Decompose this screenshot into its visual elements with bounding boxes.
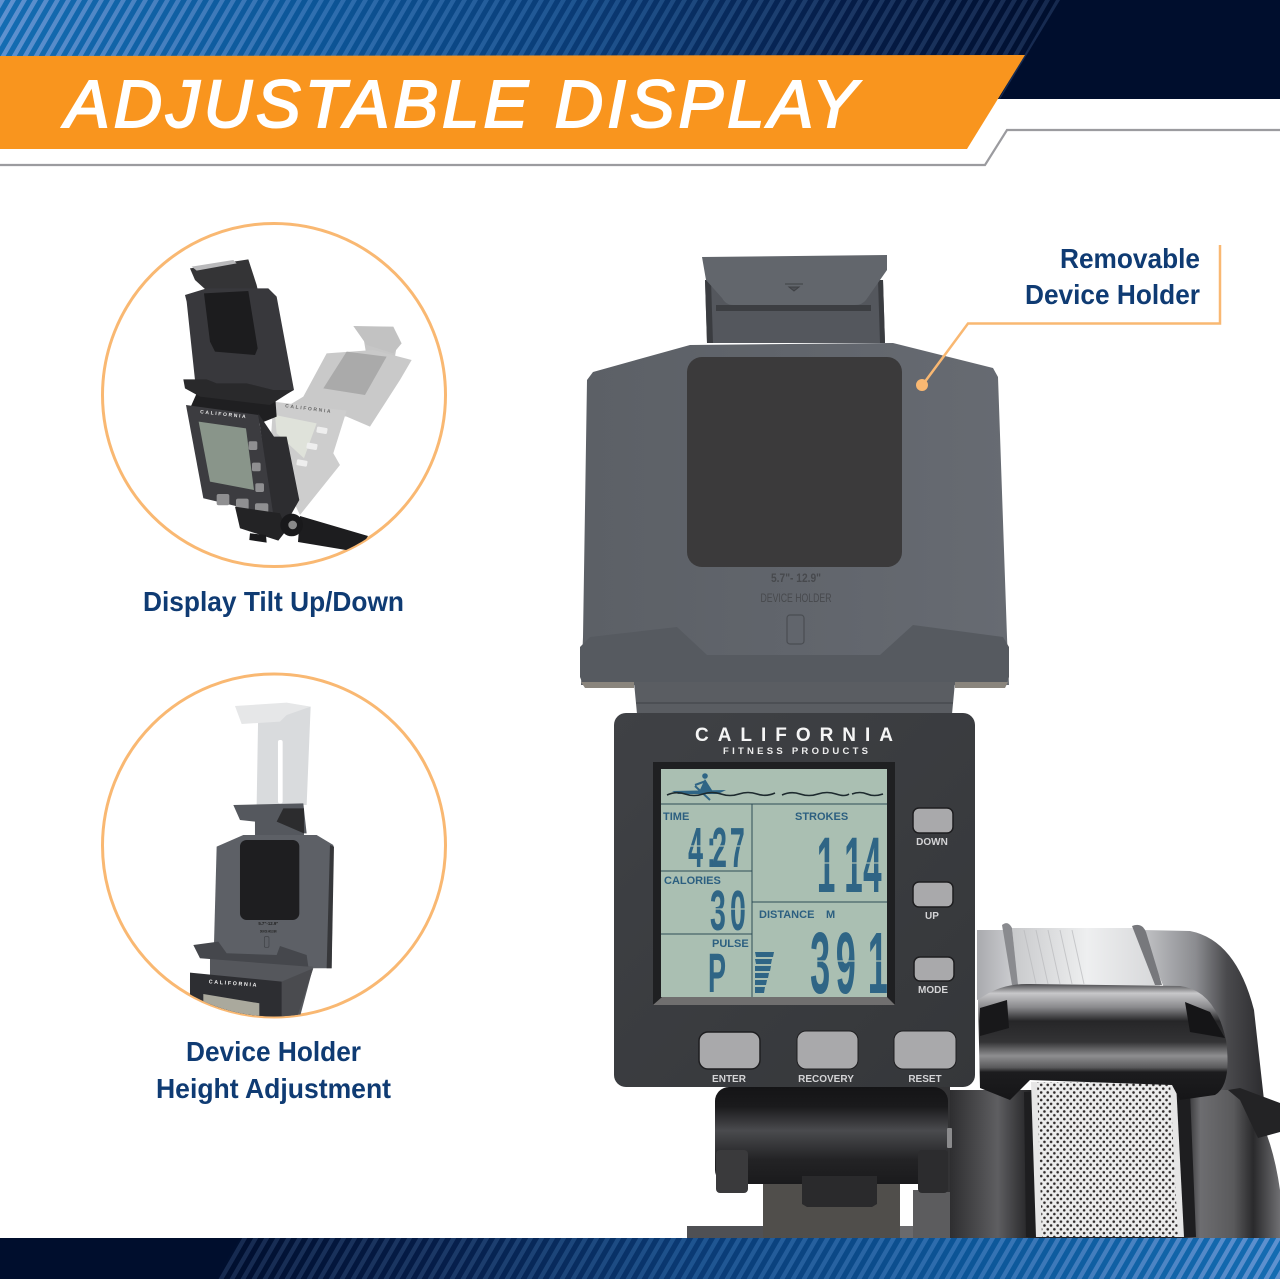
LCD readouts: 30 bbox=[710, 878, 746, 943]
device holder bbox=[580, 255, 1009, 714]
footer: striped band bbox=[0, 1238, 1280, 1279]
side buttons: DOWN bbox=[916, 837, 948, 848]
text: display tilt caption: Display Tilt Up/Down bbox=[143, 586, 404, 617]
LCD bezel bbox=[653, 762, 895, 1005]
holder top clip bbox=[702, 255, 887, 305]
tilted console and holder bbox=[183, 259, 303, 543]
ghost tilted holder bbox=[270, 326, 412, 515]
molded size text bbox=[760, 571, 832, 644]
LCD labels: M bbox=[826, 909, 835, 921]
callout text: Removable bbox=[1060, 243, 1200, 274]
foam pad bbox=[687, 357, 902, 567]
title: ADJUSTABLE DISPLAY bbox=[61, 67, 861, 142]
header: orange title ribbon bbox=[0, 55, 1025, 149]
LCD readouts: 114 bbox=[817, 820, 882, 909]
side buttons bbox=[913, 808, 954, 996]
LCD readouts: 391 bbox=[810, 916, 888, 1013]
LCD readouts: 4:27 bbox=[688, 817, 745, 880]
LCD labels: DISTANCE bbox=[759, 909, 814, 921]
brand text bbox=[695, 725, 893, 757]
mesh frame bbox=[1024, 1092, 1196, 1237]
side buttons: MODE bbox=[918, 985, 948, 996]
callout: removable device holder bbox=[916, 243, 1220, 391]
holder rear arm bbox=[705, 280, 885, 343]
lower body bbox=[948, 1090, 1280, 1238]
perforated mesh panel bbox=[1037, 1082, 1178, 1237]
LCD readouts: P bbox=[708, 941, 726, 1004]
fan housing bbox=[948, 923, 1280, 1238]
raised holder and console: DEVICE HOLDER bbox=[260, 928, 277, 933]
bottom buttons: ENTER bbox=[712, 1074, 747, 1085]
circle inset: display tilt bbox=[102, 224, 446, 566]
brand text: FITNESS PRODUCTS bbox=[723, 746, 868, 757]
water waves bbox=[667, 792, 883, 796]
molded size text: DEVICE HOLDER bbox=[760, 591, 832, 605]
rower icon bbox=[672, 773, 726, 800]
LCD labels bbox=[663, 811, 848, 950]
LCD labels: PULSE bbox=[712, 938, 749, 950]
header: striped band bbox=[0, 0, 1280, 99]
LCD labels: CALORIES bbox=[664, 875, 721, 887]
callout text: Device Holder bbox=[1025, 279, 1200, 310]
callout text bbox=[1025, 243, 1200, 310]
console bbox=[614, 713, 975, 1087]
LCD labels: TIME bbox=[663, 811, 689, 823]
circle inset: device holder height bbox=[102, 674, 446, 1018]
brand text: CALIFORNIA bbox=[695, 725, 893, 746]
tilted console and holder: CALIFORNIA bbox=[200, 409, 248, 420]
molded size text: 5.7"- 12.9" bbox=[771, 571, 821, 585]
LCD screen bbox=[661, 769, 888, 1013]
text: device holder height caption: Height Adjustment bbox=[156, 1073, 391, 1104]
holder plate bbox=[581, 343, 1009, 685]
text: device holder height caption bbox=[156, 1036, 391, 1104]
bottom buttons: RESET bbox=[908, 1074, 942, 1085]
raised holder and console bbox=[190, 703, 334, 1018]
ghost tilted holder: CALIFORNIA bbox=[285, 403, 333, 415]
fin bbox=[1228, 1088, 1280, 1138]
holder connector bbox=[634, 682, 955, 714]
raised holder and console: CALIFORNIA bbox=[209, 979, 258, 989]
text: device holder height caption: Device Holder bbox=[186, 1036, 361, 1067]
tube bbox=[298, 516, 368, 552]
silver drum bbox=[1012, 928, 1162, 990]
LCD labels: STROKES bbox=[795, 811, 848, 823]
housing side caps bbox=[977, 930, 1018, 1000]
bottom buttons: RECOVERY bbox=[798, 1074, 854, 1085]
header: grey rule bbox=[0, 130, 1280, 165]
LCD readouts bbox=[688, 817, 888, 1013]
level bars bbox=[755, 952, 774, 993]
pivot mount under console bbox=[687, 1087, 952, 1238]
raised holder and console: 5.7"-12.9" bbox=[258, 921, 278, 926]
bottom buttons bbox=[699, 1031, 956, 1085]
holder lip bbox=[580, 625, 1009, 682]
side buttons: UP bbox=[925, 911, 939, 922]
grip handle bbox=[978, 984, 1228, 1100]
